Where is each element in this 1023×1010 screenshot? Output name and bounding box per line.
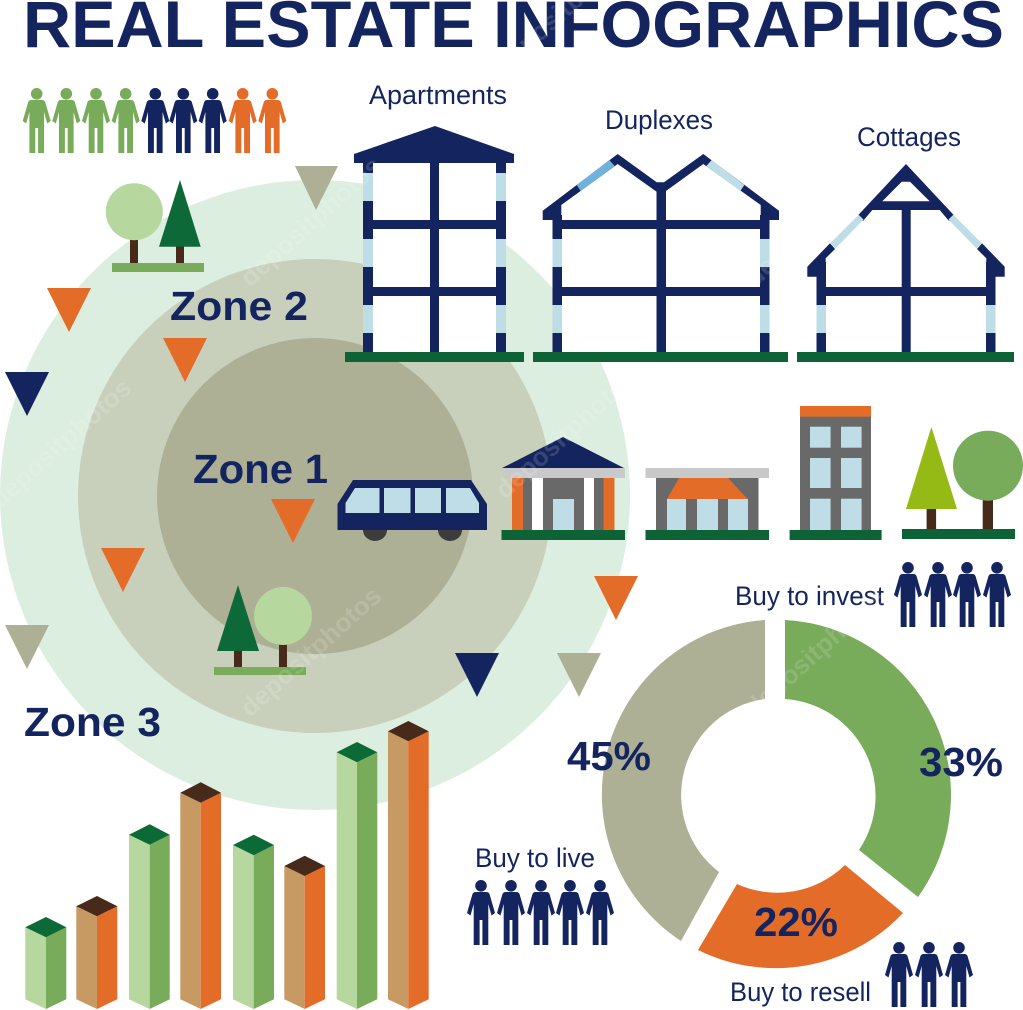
watermark: depositphotos — [739, 150, 892, 292]
segment: buy to invest 33% — [785, 620, 951, 897]
watermark: depositphotos — [489, 362, 642, 504]
zone 2 circle — [78, 259, 552, 733]
label: Buy to live: Buy to live — [475, 843, 595, 873]
value: 22%: 22% — [754, 899, 838, 945]
zone circles map — [0, 180, 630, 810]
label: Apartments: Apartments — [369, 80, 507, 110]
icon: trees lower centre — [214, 585, 312, 675]
bar 7 — [337, 742, 377, 1009]
map markers: triangles — [5, 166, 638, 697]
3D bar chart — [25, 721, 429, 1009]
icon: bus — [338, 480, 487, 541]
people: buy to invest — [894, 562, 1011, 627]
label: Buy to invest: Buy to invest — [735, 581, 884, 611]
bar 3 — [129, 824, 170, 1009]
label: Cottages: Cottages — [857, 122, 961, 152]
label: Zone 1: Zone 1 — [193, 446, 328, 492]
building section: apartments — [345, 126, 524, 362]
segment: buy to live 45% — [602, 620, 765, 941]
icon: trees right — [902, 427, 1023, 539]
bar 5 — [233, 835, 274, 1009]
icon: shop building — [646, 468, 769, 540]
zone 3 circle — [0, 180, 630, 810]
value: 45%: 45% — [567, 733, 651, 779]
watermark: depositphotos — [234, 580, 387, 722]
people: buy to resell — [885, 942, 973, 1007]
bar 1 — [25, 917, 66, 1009]
segment: buy to resell 22% — [698, 865, 903, 968]
value: 33%: 33% — [919, 739, 1003, 785]
label: Duplexes: Duplexes — [605, 105, 713, 135]
donut chart — [602, 620, 951, 968]
label: Zone 3: Zone 3 — [24, 699, 161, 745]
icon: office tower — [790, 406, 882, 540]
people row: population — [23, 88, 286, 153]
bar 2 — [76, 896, 117, 1009]
icon: bank building — [502, 437, 625, 540]
bar 4 — [180, 782, 221, 1009]
watermark: depositphotos — [234, 150, 387, 292]
bar 8 — [388, 721, 429, 1009]
icon: trees upper left — [106, 180, 204, 272]
bar 6 — [284, 856, 325, 1009]
label: Zone 2: Zone 2 — [170, 283, 308, 329]
watermark: depositphotos — [739, 580, 892, 722]
building section: duplexes — [533, 154, 788, 362]
label: Buy to resell: Buy to resell — [730, 977, 871, 1007]
zone 1 circle — [157, 338, 473, 654]
building section: cottages — [797, 164, 1014, 362]
people: buy to live — [467, 880, 614, 945]
